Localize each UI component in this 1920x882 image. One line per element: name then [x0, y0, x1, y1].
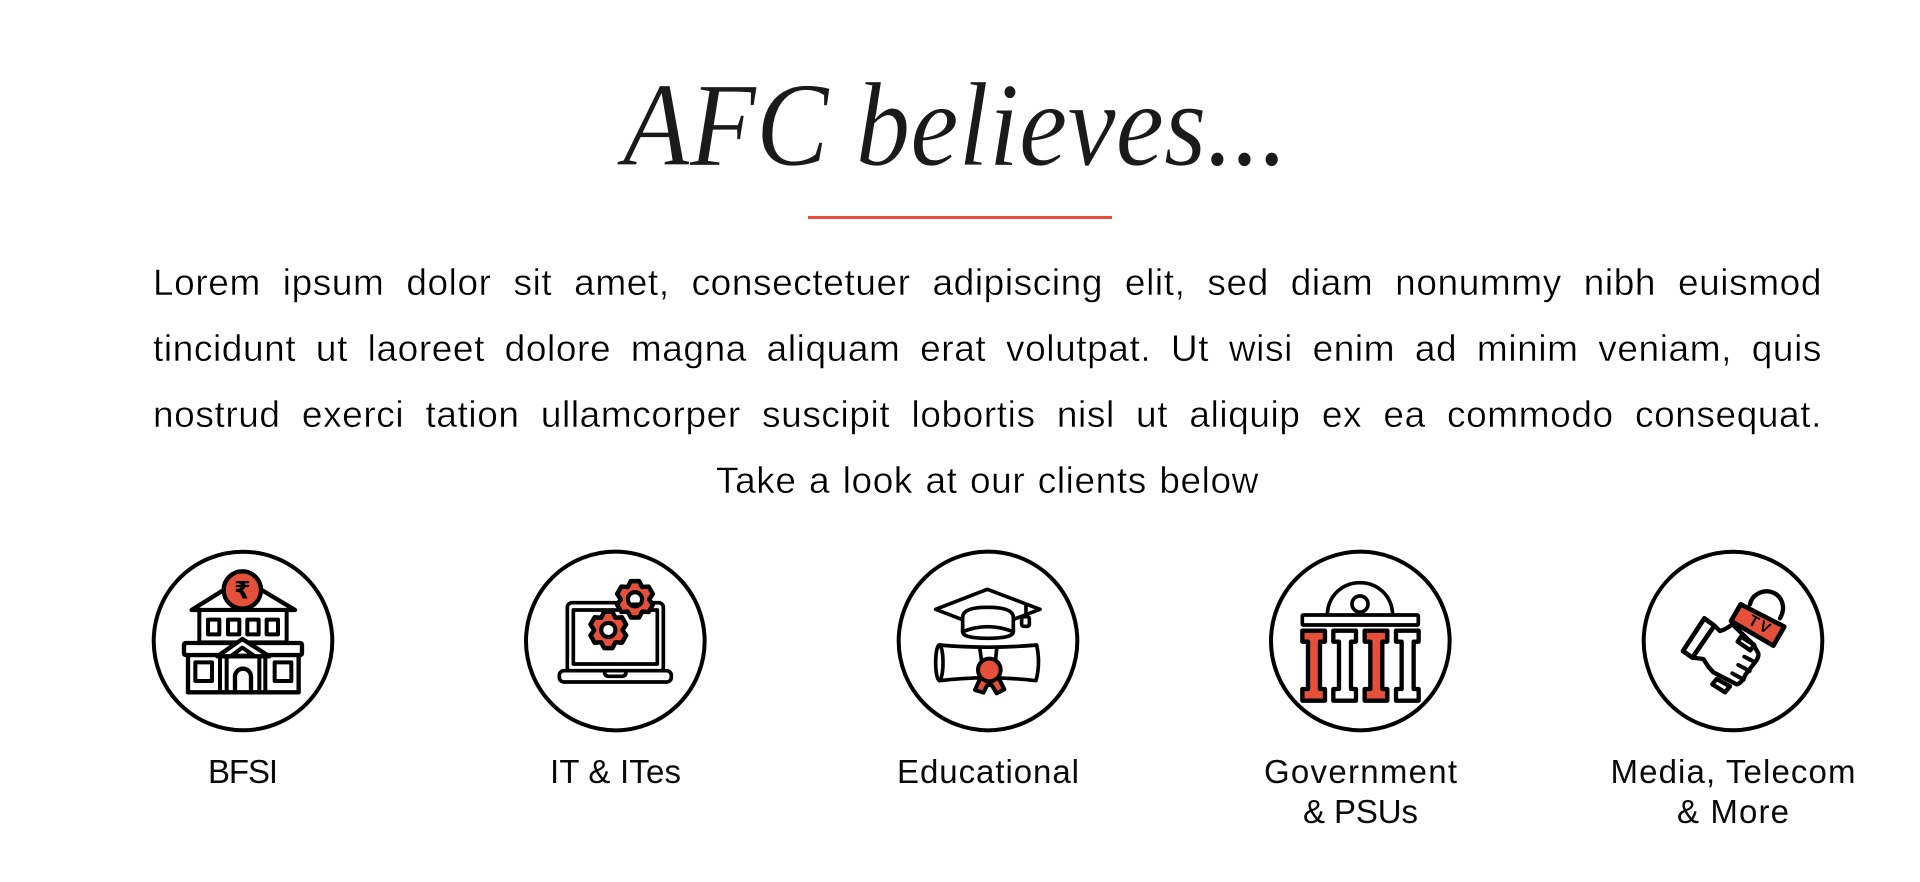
icon: bank circle	[154, 552, 332, 730]
label: Media, Telecom and More: & More	[1677, 793, 1789, 830]
icon: hand holding TV microphone: TV	[1745, 612, 1775, 639]
text block: intro paragraph: nostrud exerci tation ullamcorper suscipit lobortis nisl ut aliquip ex ea commodo consequat.	[153, 394, 1822, 435]
client: BFSI	[154, 552, 332, 790]
text block: intro paragraph: tincidunt ut laoreet dolore magna aliquam erat volutpat. Ut wisi enim ad minim veniam, quis	[153, 328, 1822, 369]
label: IT and ITes: IT & ITes	[550, 753, 681, 790]
client: IT and ITes	[526, 552, 705, 790]
label: BFSI: BFSI	[208, 753, 278, 790]
text block: intro paragraph	[153, 262, 1822, 501]
label: Media, Telecom and More: Media, Telecom	[1610, 753, 1856, 790]
icon: laptop with gears	[526, 552, 705, 730]
label: Government and PSUs: Government	[1264, 753, 1457, 790]
icon: government building	[1271, 552, 1450, 730]
label: Government and PSUs: & PSUs	[1303, 793, 1418, 830]
title: AFC believes...	[617, 58, 1288, 191]
text block: intro paragraph: Lorem ipsum dolor sit amet, consectetuer adipiscing elit, sed diam nonummy nibh euismod	[153, 262, 1822, 303]
icon: bank circle: ₹	[234, 576, 251, 604]
client: Educational	[897, 552, 1079, 790]
client: Media, Telecom and More	[1610, 552, 1856, 830]
client: Government and PSUs	[1264, 552, 1457, 830]
icon: graduation cap and diploma	[899, 552, 1077, 730]
title underline	[808, 216, 1112, 219]
icon: hand holding TV microphone	[1644, 552, 1822, 730]
text block: intro paragraph: Take a look at our clients below	[716, 460, 1259, 501]
label: Educational: Educational	[897, 753, 1079, 790]
